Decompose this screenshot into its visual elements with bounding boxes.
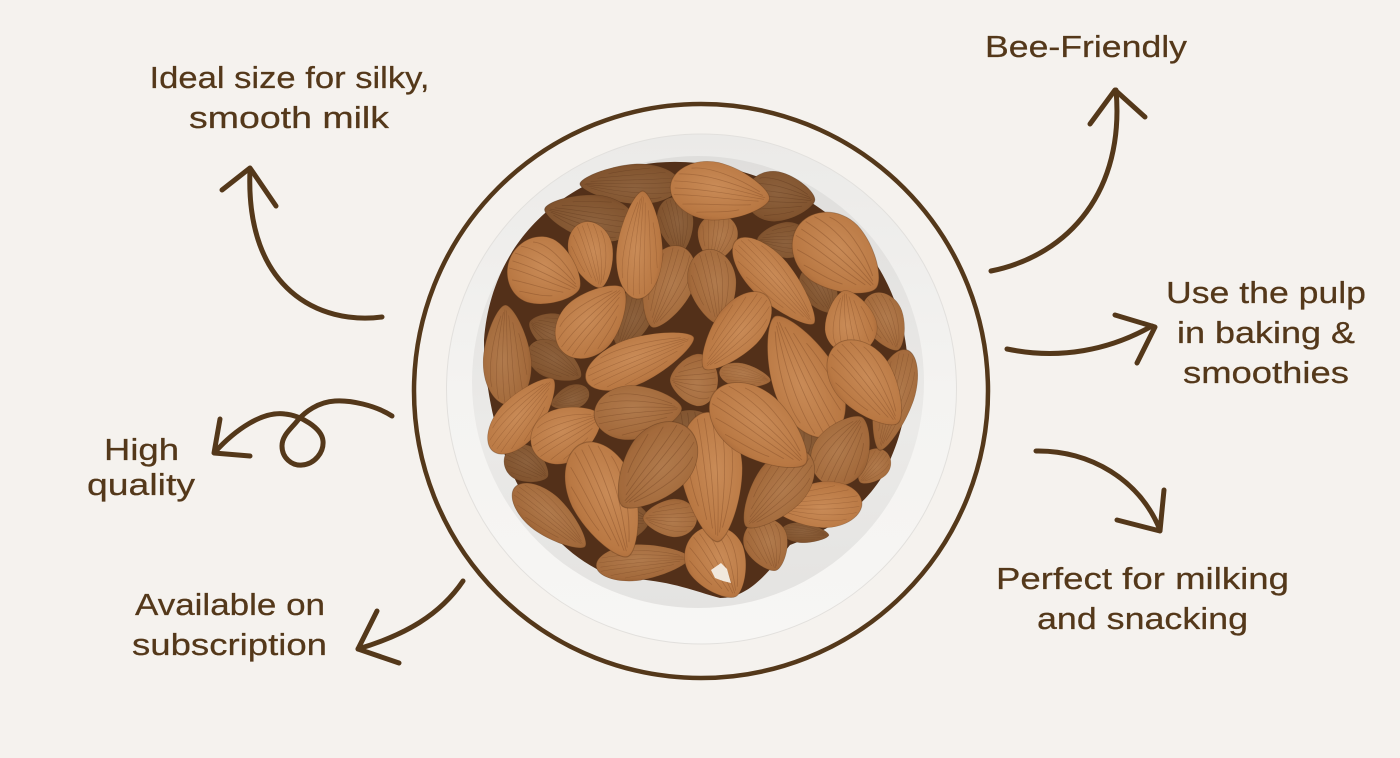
text: available on subscription: subscription [132, 627, 327, 662]
text: ideal size: Ideal size for silky, [150, 60, 430, 95]
text: use the pulp [1166, 275, 1366, 390]
callout: high quality [87, 401, 392, 502]
text: high quality: quality [87, 467, 196, 502]
callout: ideal size [150, 60, 430, 318]
large circle outline [414, 104, 988, 678]
text: use the pulp: smoothies [1183, 355, 1349, 390]
text: use the pulp: in baking & [1177, 315, 1355, 350]
almonds [476, 156, 926, 611]
text: high quality [87, 432, 196, 502]
arrow: available on subscription [358, 581, 463, 663]
arrow: perfect for milking [1036, 451, 1164, 531]
text: perfect for milking: Perfect for milking [996, 561, 1289, 596]
arrow: bee-friendly [991, 90, 1145, 271]
text: available on subscription: Available on [135, 587, 325, 622]
arrow: high quality [214, 401, 392, 465]
text: perfect for milking [996, 561, 1289, 636]
callout: use the pulp [1007, 275, 1366, 390]
callout: perfect for milking [996, 451, 1289, 636]
text: ideal size: smooth milk [189, 100, 390, 135]
text: ideal size [150, 60, 430, 135]
white bowl [446, 134, 956, 644]
text: bee-friendly: Bee-Friendly [985, 29, 1188, 64]
text: use the pulp: Use the pulp [1166, 275, 1366, 310]
white skin patch [711, 563, 731, 583]
text: high quality: High [104, 432, 179, 467]
arrow: use the pulp [1007, 315, 1155, 363]
text: available on subscription [132, 587, 327, 662]
photo: bowl of almonds [446, 134, 956, 644]
arrow: ideal size [222, 168, 382, 318]
callout: bee-friendly [985, 29, 1188, 271]
callout: available on subscription [132, 581, 463, 663]
text: perfect for milking: and snacking [1037, 601, 1248, 636]
